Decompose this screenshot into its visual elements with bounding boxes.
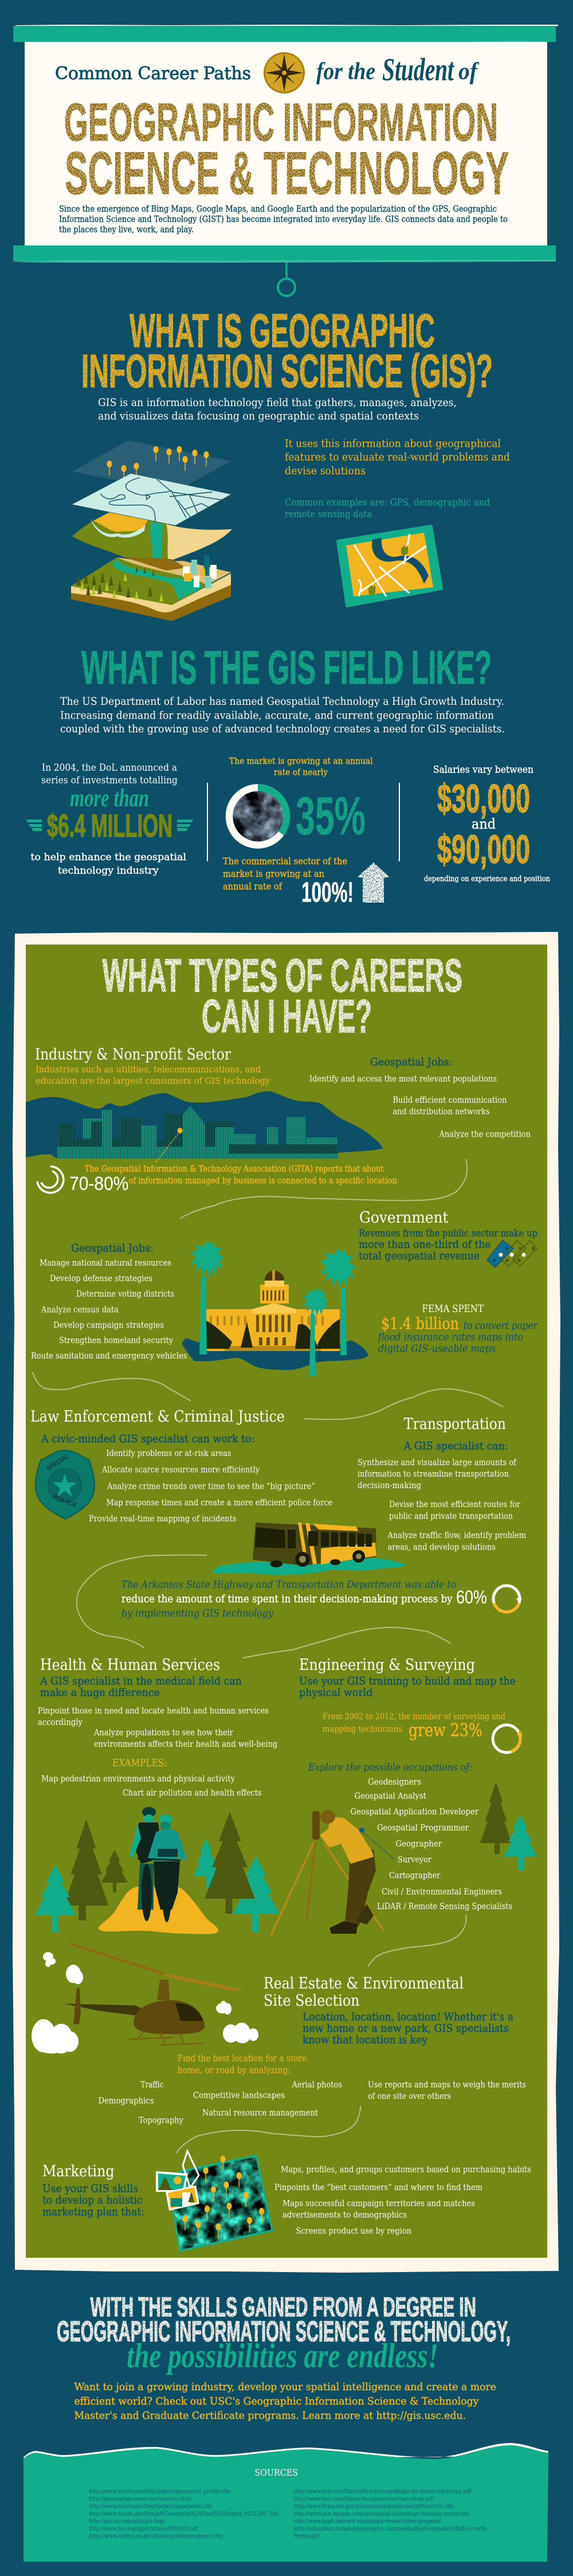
occupations list: Cartographer: [389, 1871, 441, 1880]
script: more than: more than: [70, 784, 149, 812]
real estate lead: [178, 2053, 309, 2075]
connector: real estate to marketing: [176, 2106, 361, 2153]
government geospatial jobs: Develop campaign strategies: [53, 1321, 164, 1330]
surveying growth stat: From 2002 to 2012, the number of surveying and: [323, 1712, 505, 1722]
GIS definition text: and visualizes data focusing on geographic and spatial contexts: [98, 409, 419, 422]
heading: industry: Industry & Non-profit Sector: [35, 1046, 231, 1063]
sources list: right: http://www.esri.com/library/bestpractices/real-estate.pdf: [293, 2496, 434, 2503]
heading: transportation: Transportation: [404, 1415, 506, 1433]
banner top roller: [13, 25, 559, 43]
government geospatial jobs: Develop defense strategies: [50, 1274, 152, 1283]
heading: types of careers: [102, 950, 462, 1043]
paragraph: call to action: [74, 2381, 496, 2422]
banner bottom roller: [13, 245, 556, 263]
heading: real estate: Real Estate & Environmental: [264, 1975, 464, 1992]
callout: Arkansas highway department: [121, 1579, 522, 1619]
sources list: left: http://www.doleta.gov/brg/indprof/geospatial.cfm: [89, 2503, 212, 2509]
GIS definition text: [98, 396, 457, 422]
label: examples: EXAMPLES:: [112, 1757, 167, 1769]
government revenue text: total geospatial revenue: [359, 1251, 480, 1262]
real estate intro: [303, 2011, 513, 2046]
analysis factors: Competitive landscapes: [193, 2091, 285, 2100]
illustration: city skyline on hills: [26, 1091, 383, 1158]
panel frame: [13, 932, 560, 2273]
helicopter: [64, 1943, 243, 2045]
sources background with torn edge: [23, 2443, 548, 2562]
illustration: layered GIS map stack: [71, 440, 232, 621]
occupations intro: Explore the possible occupations of:: [308, 1762, 472, 1773]
analysis factors: Topography: [139, 2116, 184, 2125]
health tasks: environments affects their health and well-being: [94, 1740, 277, 1749]
chart: 23 percent ring: [493, 1725, 523, 1753]
real estate intro: new home or a new park, GIS specialists: [303, 2022, 509, 2035]
market growth text: [229, 756, 373, 778]
layer: terrain block: [71, 555, 231, 621]
transportation tasks: Analyze traffic flow, identify problem: [387, 1531, 526, 1540]
occupations list: [351, 1778, 512, 1911]
GIS definition text: GIS is an information technology field that gathers, manages, analyzes,: [98, 396, 457, 409]
government geospatial jobs: Geospatial Jobs:: [71, 1242, 154, 1255]
icon: 70-80 percent rings: [37, 1166, 64, 1193]
layer: street map: [72, 474, 231, 526]
illustration: cyclists in forest: [34, 1807, 279, 1934]
surveying growth stat: grew 23%: [409, 1720, 482, 1741]
heading: sources: SOURCES: [254, 2468, 298, 2478]
panel background: [26, 944, 547, 2258]
sources list: left: http://www.fas.org/sgp/crs/misc/R41825.pdf: [89, 2526, 198, 2532]
site merits text: [368, 2081, 526, 2101]
illustration: helicopter with clouds: [32, 1943, 258, 2054]
text: common examples: Common examples are: GPS, demographic and: [285, 497, 490, 508]
commercial growth text: market is growing at an: [223, 869, 324, 879]
section: what is GIS: [71, 304, 510, 621]
engineering intro: [299, 1675, 516, 1699]
text: common examples: [285, 497, 490, 520]
intro paragraph: Since the emergence of Bing Maps, Google Maps, and Google Earth and the popularization of the GPS, Geographic: [59, 204, 497, 214]
industry geospatial jobs: Build efficient communication: [393, 1096, 507, 1105]
government geospatial jobs: Strengthen homeland security: [59, 1336, 174, 1345]
callout: Arkansas highway department: The Arkansas State Highway and Transportation Department was able to: [121, 1579, 456, 1591]
sources list: right: http://www.fhwa.dot.gov/publications/publicroads/06mar/05.cfm: [293, 2503, 454, 2509]
subpanel: engineering and surveying: [271, 1656, 537, 1935]
subpanel: industry and non-profit: [26, 1046, 531, 1194]
photos: [156, 2151, 199, 2211]
law enforcement tasks: Analyze crime trends over time to see the “big picture”: [107, 1482, 315, 1491]
text: common examples: remote sensing data: [285, 509, 372, 520]
word: and: and: [472, 816, 496, 832]
FEMA callout: $1.4 billion: [381, 1314, 459, 1333]
paragraph: high growth industry: coupled with the growing use of advanced technology creates a need for GIS specialists.: [60, 723, 505, 735]
subpanel: real estate and site selection: [32, 1943, 526, 2125]
pins: [182, 2156, 264, 2238]
heading: real estate: [264, 1975, 464, 2009]
transportation tasks: public and private transportation: [389, 1512, 513, 1521]
occupations list: Civil / Environmental Engineers: [382, 1888, 502, 1897]
callout: GITA pin: [156, 1127, 182, 1162]
chart: 35 percent donut with earth: [229, 788, 286, 845]
subpanel: law enforcement: [30, 1408, 332, 1524]
law enforcement tasks: Identify problems or at-risk areas: [107, 1449, 231, 1458]
banner: header scroll: [13, 25, 559, 296]
illustration: capitol island with palms: [182, 1240, 368, 1376]
marketing tasks: advertisements to demographics: [282, 2211, 407, 2220]
investment purpose text: to help enhance the geospatial: [31, 852, 186, 863]
site merits text: Use reports and maps to weigh the merits: [368, 2081, 526, 2090]
paragraph: high growth industry: The US Department of Labor has named Geospatial Technology a High Growth Industry.: [60, 695, 504, 708]
transportation tasks: areas, and develop solutions: [387, 1543, 496, 1552]
paragraph: call to action: Want to join a growing industry, develop your spatial intelligence and create a more: [74, 2381, 496, 2393]
sources list: left: http://www.calmis.ca.gov/file/occguide/geogspec.htm: [89, 2532, 223, 2539]
sources list: right: http://www.esri.com/library/brochures/pdfs/gis-for-direct-marketing.pdf: [293, 2488, 472, 2495]
occupations list: LiDAR / Remote Sensing Specialists: [377, 1902, 512, 1911]
FEMA callout: digital GIS-useable maps: [378, 1343, 496, 1355]
commercial growth text: [223, 856, 347, 892]
heading: skills gained: [57, 2292, 511, 2348]
stat: salaries: [424, 764, 551, 883]
icon: up arrow: [358, 862, 389, 903]
investment intro text: series of investments totalling: [41, 775, 178, 786]
transportation tasks: decision-making: [358, 1481, 421, 1490]
subpanel: marketing: [42, 2151, 531, 2252]
icon: police badge: POLICE: [52, 1493, 78, 1509]
paragraph: high growth industry: [60, 695, 505, 735]
analysis factors: Traffic: [141, 2081, 164, 2090]
script subtitle: for the student of: Student: [382, 52, 454, 88]
transportation tasks: information to streamline transportation: [358, 1470, 509, 1479]
heading: government: Government: [359, 1209, 449, 1227]
government revenue text: more than one-third of the: [359, 1239, 490, 1251]
banner paper: [25, 42, 547, 245]
government revenue text: [359, 1228, 537, 1262]
stat: market growth: [223, 756, 389, 908]
callout: Arkansas highway department: by implementing GIS technology: [121, 1608, 274, 1619]
real estate intro: Location, location, location! Whether it's a: [303, 2011, 513, 2023]
health examples: Map pedestrian environments and physical activity: [41, 1774, 236, 1783]
callout: Arkansas highway department: reduce the amount of time spent in their decision-making process by: [121, 1594, 453, 1605]
marketing tasks: Pinpoints the “best customers” and where to find them: [274, 2183, 482, 2192]
connector: government to law enforcement: [33, 1372, 191, 1401]
marketing tasks: Maps, profiles, and groups customers based on purchasing habits: [281, 2165, 531, 2175]
icon: compass: [264, 52, 305, 93]
sources list: left: http://gis.usc.edu/gist/gis-faqs/: [89, 2518, 166, 2524]
sources list: right: [293, 2488, 488, 2539]
marker dot and leader to surveyor: [359, 1828, 395, 1860]
transportation tasks: Devise the most efficient routes for: [389, 1500, 520, 1509]
section: call to action: [57, 2292, 511, 2422]
illustration: right trees: [480, 1782, 537, 1871]
subtitle: common career paths: Common Career Paths: [55, 64, 251, 84]
marketing intro: marketing plan that:: [42, 2206, 144, 2218]
surveying growth stat: [323, 1712, 523, 1753]
GITA text: [85, 1165, 397, 1186]
government geospatial jobs: Route sanitation and emergency vehicles: [31, 1352, 187, 1361]
transportation tasks: Synthesize and visualize large amounts of: [358, 1458, 517, 1467]
sources list: left: [89, 2488, 279, 2539]
health intro: A GIS specialist in the medical field can: [40, 1675, 242, 1687]
text: uses of information: It uses this information about geographical: [285, 438, 501, 450]
marketing tasks: Screens product use by region: [296, 2227, 411, 2236]
marketing intro: to develop a holistic: [42, 2194, 142, 2207]
illustration: aerial map with pins and photos: [156, 2151, 273, 2252]
intro paragraph: the places they live, work, and play.: [59, 224, 194, 235]
marketing tasks: [274, 2165, 531, 2236]
commercial growth text: annual rate of: [223, 881, 282, 892]
script subtitle: for the student of: of: [458, 58, 480, 85]
government revenue text: Revenues from the public sector make up: [359, 1228, 537, 1239]
FEMA callout: FEMA SPENT: [422, 1303, 484, 1315]
FEMA callout: flood insurance rates maps into: [377, 1332, 523, 1343]
industry consumers text: Industries such as utilities, telecommunications, and: [36, 1064, 261, 1075]
law enforcement tasks: Map response times and create a more efficient police force: [107, 1498, 332, 1508]
text: uses of information: [285, 438, 510, 477]
government geospatial jobs: Analyze census data: [41, 1305, 119, 1314]
FEMA callout: [377, 1303, 538, 1355]
sources list: left: http://www.doleta.gov/brg/pdf/Geospatial%20Final%20Report_08212007.pdf: [89, 2511, 279, 2518]
occupations list: Geospatial Programmer: [377, 1824, 469, 1833]
icon: one-third tiles: [487, 1240, 537, 1267]
heading: health: Health & Human Services: [40, 1656, 220, 1674]
GITA text: of information managed by business is connected to a specific location: [128, 1177, 397, 1186]
aerial map: [169, 2155, 273, 2252]
real estate lead: Find the best location for a store,: [178, 2053, 309, 2063]
government geospatial jobs: [31, 1242, 187, 1361]
salary note: depending on experience and position: [424, 875, 551, 883]
sources list: right: Profile.pdf: [293, 2532, 320, 2539]
figure: 70-80 percent: 70-80%: [69, 1173, 128, 1194]
law enforcement tasks: Provide real-time mapping of incidents: [89, 1515, 236, 1524]
market growth text: The market is growing at an annual: [229, 756, 373, 766]
illustration: surveyor: [271, 1810, 395, 1935]
connector: law enforcement to transportation: [305, 1389, 503, 1419]
icon: left wing: [26, 819, 42, 831]
illustration: bus on puddle: [213, 1523, 405, 1575]
connector: engineering to real estate: [368, 1915, 466, 1967]
investment intro text: [41, 762, 178, 786]
sources list: left: http://www.doleta.gov/brg/indprof/geospatial_profile.cfm: [89, 2488, 231, 2495]
sources list: right: http://www.hsph.harvard.edu/gis/gis-research/eer-program/: [293, 2518, 442, 2524]
chart: 60 percent ring: [493, 1586, 522, 1612]
law enforcement tasks: [89, 1449, 332, 1524]
market growth text: rate of nearly: [274, 767, 328, 778]
occupations list: Surveyor: [398, 1856, 431, 1865]
icon: right wing: [177, 819, 193, 831]
investment intro text: In 2004, the DoL announced a: [42, 762, 177, 773]
figure: 35 percent: 35%: [296, 786, 366, 846]
sources list: right: http://education.nationalgeographic.com/media/file/Geospatial-High-Growth-: [293, 2526, 488, 2532]
script: possibilities endless: the possibilities are endless!: [127, 2337, 438, 2375]
heading: types of careers: CAN I HAVE?: [202, 990, 372, 1043]
industry consumers text: education are the largest consumers of GIS technology: [36, 1075, 270, 1086]
health tasks: [38, 1707, 277, 1749]
law enforcement intro: A civic-minded GIS specialist can work to:: [41, 1433, 255, 1445]
real estate intro: know that location is key: [303, 2034, 427, 2046]
occupations list: Geodesigners: [368, 1778, 421, 1787]
connector: industry to government: [180, 1160, 467, 1219]
heading: what is GIS: [81, 304, 493, 397]
paragraph: high growth industry: Increasing demand for readily available, accurate, and current geographic information: [60, 709, 494, 721]
engineering intro: physical world: [299, 1686, 372, 1699]
trees behind: [34, 1812, 279, 1932]
gold hill: [98, 1887, 218, 1934]
connector: health to engineering: [243, 1627, 450, 1658]
pull cord and ring: [278, 262, 295, 296]
text: uses of information: devise solutions: [285, 465, 366, 477]
analysis factors: Demographics: [99, 2097, 154, 2106]
callout: Arkansas highway department: 60%: [456, 1587, 487, 1607]
real estate lead: home, or road by analyzing:: [178, 2065, 291, 2075]
paragraph: call to action: efficient world? Check out USC's Geographic Information Science & Technology: [74, 2395, 479, 2407]
intro paragraph: [59, 204, 508, 235]
title: geographic information science and technology: [64, 92, 509, 207]
government geospatial jobs: Determine voting districts: [76, 1290, 174, 1299]
investment purpose text: technology industry: [58, 865, 159, 876]
panel: what types of careers: [13, 932, 560, 2273]
health tasks: accordingly: [38, 1718, 83, 1727]
sources list: left: http://geospatialcareers.net/salaries.html: [89, 2496, 191, 2503]
cyclists: [129, 1807, 187, 1922]
text: uses of information: features to evaluate real-world problems and: [285, 451, 510, 463]
transportation tasks: [358, 1458, 526, 1552]
script subtitle: for the student of: for the: [316, 58, 375, 85]
site merits text: of one site over others: [368, 2092, 451, 2101]
GITA text: The Geospatial Information & Technology Association (GITA) reports that about: [85, 1165, 384, 1174]
occupations list: Geographer: [395, 1840, 442, 1849]
connector: transportation to health: [77, 1555, 206, 1649]
surveying growth stat: mapping technicians: [323, 1725, 402, 1734]
script subtitle: for the student of: [316, 52, 480, 88]
industry geospatial jobs: Geospatial Jobs:: [370, 1056, 453, 1068]
commercial growth text: The commercial sector of the: [223, 856, 347, 867]
subpanel: transportation: [213, 1415, 526, 1575]
sources list: right: http://www.ncn-npcpss.com/geospatial-technology-training-resources/: [293, 2511, 470, 2518]
subpanel: government: [31, 1209, 538, 1376]
occupations list: Geospatial Analyst: [354, 1792, 426, 1801]
industry geospatial jobs: and distribution networks: [393, 1107, 489, 1117]
heading: marketing: Marketing: [42, 2163, 115, 2180]
industry geospatial jobs: Analyze the competition: [439, 1130, 531, 1139]
marketing intro: [42, 2183, 144, 2218]
industry geospatial jobs: Identify and access the most relevant populations: [309, 1075, 497, 1084]
transportation intro: A GIS specialist can:: [403, 1439, 508, 1452]
analysis factors: Natural resource management: [202, 2109, 318, 2118]
health examples: [41, 1774, 261, 1798]
engineering intro: Use your GIS training to build and map the: [299, 1675, 516, 1687]
icon: police badge: SPECIAL: [45, 1452, 70, 1473]
health tasks: Pinpoint those in need and locate health and human services: [38, 1707, 269, 1716]
clouds: [32, 1952, 258, 2054]
layer: land use: [72, 513, 232, 565]
marketing intro: Use your GIS skills: [42, 2183, 138, 2195]
heading: law enforcement: Law Enforcement & Criminal Justice: [30, 1408, 285, 1426]
industry geospatial jobs: [309, 1056, 531, 1139]
FEMA callout: to convert paper: [464, 1320, 538, 1332]
health examples: Chart air pollution and health effects: [123, 1789, 261, 1798]
panel: sources: [23, 2443, 548, 2562]
stat: investments: [26, 762, 193, 876]
law enforcement tasks: Allocate scarce resources more efficiently: [101, 1466, 260, 1475]
intro paragraph: Information Science and Technology (GIST) has become integrated into everyday life. GIS connects data and people to: [59, 214, 508, 224]
illustration: tablet map: [338, 526, 441, 606]
paragraph: call to action: Master's and Graduate Certificate programs. Learn more at http://gis.usc.edu.: [74, 2410, 466, 2422]
occupations list: Geospatial Application Developer: [351, 1808, 478, 1817]
investment purpose text: [31, 852, 186, 876]
heading: engineering: Engineering & Surveying: [299, 1656, 475, 1674]
health tasks: Analyze populations to see how their: [93, 1728, 233, 1738]
marketing tasks: Maps successful campaign territories and matches: [282, 2199, 475, 2208]
layer: pins plane: [72, 440, 231, 492]
section: what is the GIS field like: [26, 642, 551, 908]
heading: real estate: Site Selection: [264, 1992, 360, 2009]
analysis factors: Aerial photos: [292, 2081, 342, 2090]
health intro: [40, 1675, 242, 1699]
industry consumers text: [36, 1064, 270, 1086]
subpanel: health and human services: [34, 1656, 279, 1934]
analysis factors: [99, 2081, 342, 2125]
figure: 100 percent: 100%!: [301, 877, 354, 908]
icon: police badge: [36, 1450, 95, 1519]
amount: 6.4 million: $6.4 MILLION: [47, 807, 172, 844]
government geospatial jobs: Manage national natural resources: [40, 1259, 171, 1268]
salary label: Salaries vary between: [433, 764, 533, 775]
health intro: make a huge difference: [40, 1686, 160, 1699]
